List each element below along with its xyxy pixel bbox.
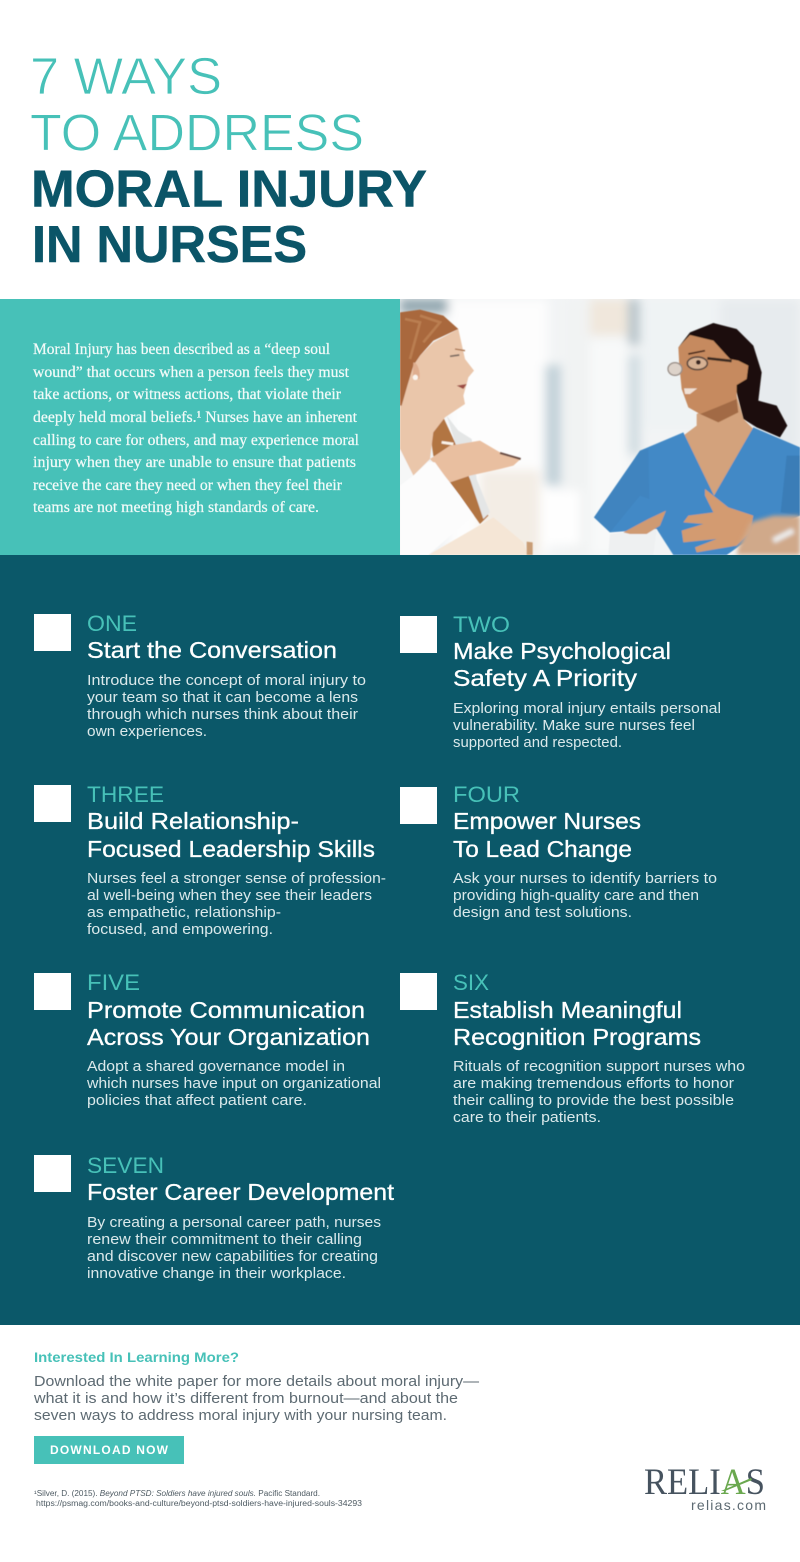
icon: placeholder square four [400, 787, 437, 824]
icon: placeholder square three [34, 785, 71, 822]
label: four: FOUR [453, 782, 520, 807]
body: seven: and discover new capabilities for creating [87, 1249, 378, 1265]
title: TO ADDRESS [30, 104, 364, 162]
item six [400, 970, 745, 1126]
intro text: Moral Injury has been described as a “deep soul [33, 341, 331, 358]
footer text [33, 1374, 480, 1424]
body: seven: renew their commitment to their calling [87, 1232, 362, 1248]
item five [34, 970, 381, 1109]
body: three: focused, and empowering. [87, 922, 273, 938]
icon: placeholder square one [34, 614, 71, 651]
footer heading: Interested In Learning More? [34, 1350, 239, 1365]
heading: make psychological safety a priority: Make Psychological [453, 638, 671, 664]
intro text: injury when they are unable to ensure that patients [33, 454, 356, 471]
body: two [453, 701, 721, 751]
body: three: as empathetic, relationship- [87, 905, 281, 921]
body: three [87, 871, 386, 938]
item seven [34, 1153, 395, 1282]
body: six: are making tremendous efforts to honor [453, 1076, 734, 1092]
heading: make psychological safety a priority: Safety A Priority [453, 665, 638, 691]
label: seven: SEVEN [87, 1153, 164, 1178]
download button [34, 1436, 184, 1464]
label: two: TWO [453, 612, 510, 637]
intro text: teams are not meeting high standards of care. [33, 499, 319, 516]
footnote: https://psmag.com/books-and-culture/beyond-ptsd-soldiers-have-injured-souls-34293 [36, 1499, 363, 1508]
icon: placeholder square six [400, 973, 437, 1010]
body: one: your team so that it can become a lens [87, 690, 358, 706]
body: four: design and test solutions. [453, 905, 632, 921]
heading: establish meaningful recognition programs: Recognition Programs [453, 1024, 701, 1050]
heading: empower nurses to lead change: To Lead Change [453, 836, 632, 862]
item four [400, 782, 717, 921]
label: three: THREE [87, 782, 164, 807]
heading: build relationship-focused leadership skills: Focused Leadership Skills [87, 836, 375, 862]
heading: empower nurses to lead change: Empower Nurses [453, 808, 641, 834]
icon: placeholder square seven [34, 1155, 71, 1192]
title: MORAL INJURY [31, 160, 427, 218]
footer text: what it is and how it’s different from burnout—and about the [33, 1391, 458, 1407]
body: six [453, 1059, 745, 1126]
body: six: their calling to provide the best possible [453, 1093, 734, 1109]
label: six: SIX [453, 970, 489, 995]
heading: establish meaningful recognition programs [453, 997, 701, 1050]
intro text: receive the care they need or when they feel their [33, 477, 343, 494]
title [30, 48, 427, 274]
download button: DOWNLOAD NOW [50, 1443, 169, 1457]
heading: empower nurses to lead change [453, 808, 641, 862]
body: three: Nurses feel a stronger sense of profession- [87, 871, 386, 887]
heading: foster career development: Foster Career Development [87, 1179, 395, 1205]
body: two: supported and respected. [453, 735, 622, 751]
label: one: ONE [87, 611, 137, 636]
body: five: Adopt a shared governance model in [87, 1059, 345, 1075]
heading: promote communication across your organization [87, 997, 370, 1050]
intro text: deeply held moral beliefs.¹ Nurses have an inherent [33, 409, 358, 426]
intro text: take actions, or witness actions, that violate their [33, 386, 342, 403]
heading: start the conversation: Start the Conversation [87, 637, 337, 663]
body: six: Rituals of recognition support nurses who [453, 1059, 745, 1075]
footer text: seven ways to address moral injury with your nursing team. [34, 1408, 447, 1424]
body: one: through which nurses think about their [87, 707, 358, 723]
icon: placeholder square five [34, 973, 71, 1010]
right nurse [594, 323, 800, 555]
body: five: policies that affect patient care. [87, 1093, 307, 1109]
body: six: care to their patients. [453, 1110, 601, 1126]
heading: promote communication across your organization: Across Your Organization [87, 1024, 370, 1050]
item one [34, 611, 366, 740]
intro text: calling to care for others, and may experience moral [33, 432, 360, 449]
footnote: ¹Silver, D. (2015). Beyond PTSD: Soldiers have injured souls. Pacific Standard. [34, 1489, 320, 1498]
body: seven: By creating a personal career path, nurses [87, 1215, 381, 1231]
body: one: own experiences. [87, 724, 207, 740]
label: five: FIVE [87, 970, 140, 995]
title: IN NURSES [32, 216, 307, 274]
title: 7 WAYS [30, 48, 222, 106]
body: one [87, 673, 366, 740]
intro text [33, 341, 360, 516]
logo: relias: RELIAS [644, 1462, 765, 1503]
logo: relias: relias.com [691, 1497, 766, 1513]
panel: seven ways [0, 555, 800, 1325]
body: three: al well-being when they see their leaders [87, 888, 372, 904]
footer text: Download the white paper for more details about moral injury— [34, 1374, 480, 1390]
photo: two nurses talking [400, 299, 800, 555]
heading: build relationship-focused leadership skills: Build Relationship- [87, 808, 299, 834]
body: five: which nurses have input on organizational [86, 1076, 381, 1092]
body: four: providing high-quality care and then [453, 888, 699, 904]
intro text: wound” that occurs when a person feels they must [33, 364, 350, 381]
left nurse [400, 310, 533, 555]
footnote [34, 1489, 363, 1508]
body: one: Introduce the concept of moral injury to [87, 673, 366, 689]
heading: promote communication across your organization: Promote Communication [87, 997, 365, 1023]
body: two: Exploring moral injury entails personal [453, 701, 721, 717]
body: four: Ask your nurses to identify barriers to [453, 871, 717, 887]
heading: establish meaningful recognition programs: Establish Meaningful [453, 997, 682, 1023]
body: four [453, 871, 717, 921]
heading: make psychological safety a priority [453, 638, 671, 691]
item three [34, 782, 386, 938]
body: seven [87, 1215, 381, 1282]
heading: build relationship-focused leadership skills [87, 808, 375, 862]
body: seven: innovative change in their workplace. [87, 1266, 346, 1282]
body: five [86, 1059, 381, 1109]
foreground hand [737, 516, 800, 555]
panel: intro [0, 299, 401, 555]
item two [400, 612, 721, 751]
body: two: vulnerability. Make sure nurses feel [453, 718, 695, 734]
icon: placeholder square two [400, 616, 437, 653]
